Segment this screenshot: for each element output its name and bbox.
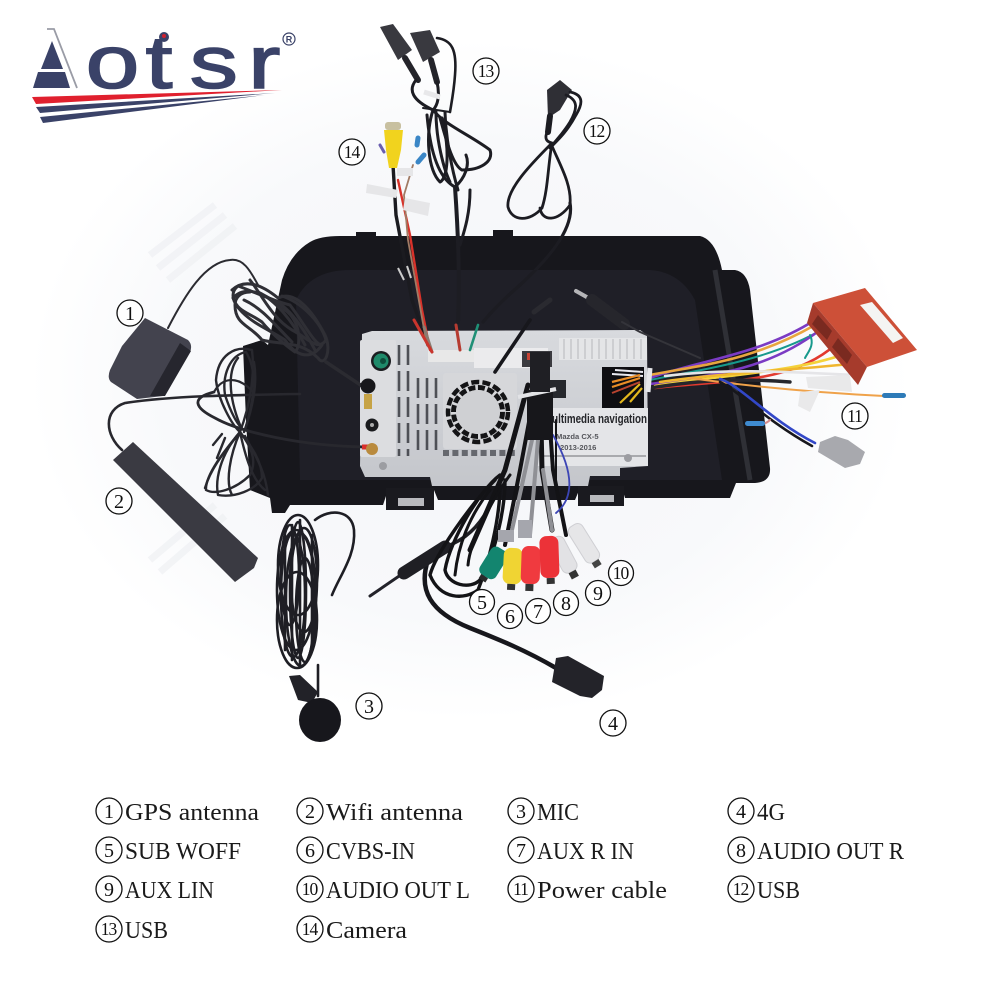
wire labels (798, 375, 852, 412)
USB plugs (380, 24, 440, 62)
legend item 13: USB (125, 917, 168, 944)
callout 10: 10 (613, 563, 630, 583)
callout 8: 8 (561, 593, 571, 615)
legend item 1: GPS antenna (125, 799, 259, 826)
gray tags (498, 520, 532, 542)
callout 11 (842, 403, 868, 429)
logo registered mark: R (286, 34, 293, 44)
head unit label (536, 408, 648, 466)
callout 9: 9 (593, 583, 603, 605)
logo wordmark: otsr (86, 22, 280, 104)
callout 9 (586, 580, 610, 606)
callout 1 (117, 300, 143, 326)
ventilation dots bottom (443, 450, 517, 456)
callout 12 (584, 118, 610, 144)
callout 3: 3 (364, 696, 374, 718)
legend item 7 (508, 837, 634, 865)
harness tie (648, 368, 650, 392)
legend item 7: AUX R IN (537, 838, 634, 865)
green round port (371, 351, 391, 371)
logo red dot (159, 32, 169, 42)
RCA plug: white right (566, 521, 605, 570)
harness wires (650, 320, 884, 446)
bundle cable tie and black wrap (518, 352, 556, 440)
black pins (398, 266, 411, 280)
top rib block (559, 338, 647, 360)
legend item 4: 4 (736, 801, 746, 823)
legend item 6: CVBS-IN (326, 838, 415, 865)
round port (366, 418, 378, 432)
mic clip (289, 675, 318, 703)
head unit label: Multimedia navigation (544, 412, 647, 426)
legend item 12 (728, 876, 800, 904)
right black connector socket (602, 367, 644, 409)
yellow RCA (384, 122, 403, 168)
head unit label: Mazda CX-5 (556, 432, 599, 441)
WiFi antenna bar (113, 442, 258, 582)
callout 6: 6 (505, 606, 515, 628)
legend item 12: 12 (733, 879, 748, 899)
legend item 8: 8 (736, 840, 746, 862)
legend item 4 (728, 798, 785, 826)
top connector row (428, 348, 552, 368)
legend item 7: 7 (516, 840, 526, 862)
legend item 3: 3 (516, 801, 526, 823)
mic coil (277, 513, 354, 696)
legend item 10: 10 (302, 879, 318, 899)
wire labels (366, 168, 430, 216)
callout 8 (554, 590, 578, 616)
legend item 13: 13 (101, 919, 118, 939)
legend item 3 (508, 798, 579, 826)
panel: head unit (360, 330, 648, 486)
legend item 2: 2 (305, 801, 315, 823)
RCA harness bundle (430, 352, 605, 596)
callout 2: 2 (114, 491, 124, 513)
head unit left plate (360, 340, 396, 457)
callout 10 (608, 560, 634, 586)
blue terminal tip (882, 393, 906, 398)
part 11: power cable harness (648, 288, 917, 468)
mic head (299, 698, 341, 742)
legend item 2: Wifi antenna (326, 799, 463, 826)
RCA plug: red left (520, 546, 541, 591)
GPS antenna block (109, 318, 191, 399)
4G antenna block (552, 656, 604, 698)
legend (96, 798, 905, 944)
blue wire (553, 435, 569, 513)
part 4: 4G antenna cable (425, 560, 604, 698)
RCA plug: red right (539, 536, 560, 584)
legend item 11: 11 (513, 879, 528, 899)
bundle black wires (430, 380, 566, 596)
audio jack cable (370, 500, 492, 596)
USB cables (412, 38, 491, 322)
USB boots (405, 58, 437, 82)
legend item 3: MIC (537, 799, 579, 826)
USB cable loops (483, 92, 581, 322)
legend item 4: 4G (757, 799, 785, 826)
panel: black frame bezel (243, 230, 770, 513)
legend item 1: 1 (104, 801, 114, 823)
callout 7 (526, 598, 550, 624)
part 2: WiFi antenna with coil (109, 349, 378, 582)
legend item 14 (297, 916, 407, 944)
logo mark: triangle A (33, 29, 77, 88)
gray plug (818, 436, 865, 468)
legend item 6 (297, 837, 415, 865)
callout 14 (339, 139, 365, 165)
callout 3 (356, 693, 382, 719)
legend item 6: 6 (305, 840, 315, 862)
part 12: USB cable (483, 80, 581, 322)
legend item 5: SUB WOFF (125, 838, 241, 865)
callout 14: 14 (344, 142, 360, 162)
fan panel (443, 373, 517, 449)
legend item 10: AUDIO OUT L (326, 877, 470, 904)
USB plug (547, 80, 572, 118)
screws (379, 454, 632, 470)
RCA plug: yellow (502, 548, 523, 590)
legend item 14: Camera (326, 917, 407, 944)
callout 4 (600, 710, 626, 736)
callout 2 (106, 488, 132, 514)
cooling fan (448, 382, 508, 442)
RCA plug: green (474, 544, 510, 586)
frame top clips (356, 230, 513, 240)
callout 6 (498, 604, 522, 628)
callout 7: 7 (533, 601, 543, 623)
vent slots left (399, 345, 436, 456)
part 13: dual USB cable (380, 24, 491, 322)
callout 1: 1 (125, 303, 135, 325)
RCA plug: white left (547, 534, 582, 581)
blue terminal tip lower (745, 421, 765, 426)
GPS SMA connector (360, 378, 376, 409)
frame bottom tabs (386, 486, 624, 510)
callout 12: 12 (589, 121, 604, 141)
part 1: GPS antenna with coil (109, 260, 375, 409)
legend item 12: USB (757, 877, 800, 904)
frame inner panel (296, 270, 722, 480)
WiFi cable and coil (109, 349, 366, 496)
legend item 11: Power cable (537, 877, 667, 904)
head unit body (360, 330, 648, 486)
legend item 14: 14 (302, 919, 318, 939)
part 14: camera cable (366, 122, 432, 352)
frame side rail (715, 270, 750, 480)
WiFi RCA connector tip (362, 443, 378, 455)
legend item 8: AUDIO OUT R (757, 838, 905, 865)
callout 4: 4 (608, 713, 618, 735)
blue terminal tips (380, 138, 424, 162)
callout 11: 11 (847, 406, 862, 426)
bundle gray wires (512, 440, 552, 535)
legend item 9 (96, 876, 214, 904)
legend item 9: 9 (104, 879, 114, 901)
part 3: microphone with coil (277, 513, 354, 742)
logo: Aotsr (32, 22, 295, 123)
callout 5 (470, 590, 494, 614)
legend item 9: AUX LIN (125, 877, 214, 904)
GPS cable and coil (168, 260, 362, 386)
logo registered mark (283, 33, 295, 45)
cable: FM antenna plug (576, 291, 700, 358)
legend item 5: 5 (104, 840, 114, 862)
callout 13 (473, 58, 499, 84)
callout 13: 13 (478, 61, 494, 81)
head unit label: 2013-2016 (560, 443, 596, 452)
small dark window (547, 380, 566, 398)
callout 5: 5 (477, 592, 487, 614)
legend item 13 (96, 916, 168, 944)
head unit top harness wires (414, 300, 550, 372)
orange connector block (807, 288, 917, 385)
logo swoosh (32, 90, 282, 123)
